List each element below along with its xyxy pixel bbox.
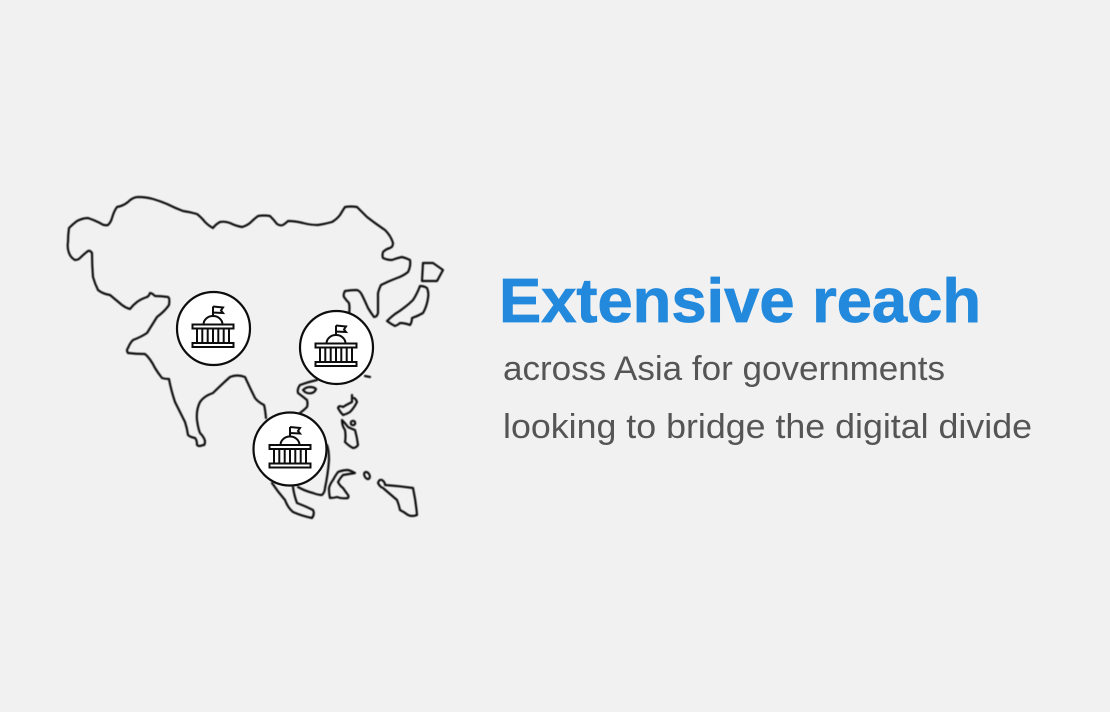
subtext line 2: looking to bridge the digital divide: [503, 408, 1032, 446]
government marker: Southeast Asia: [254, 412, 326, 486]
Malay peninsula and Borneo coast: [272, 483, 314, 518]
government marker: China: [300, 311, 373, 384]
south China coast: [298, 380, 317, 413]
icon: government building: [316, 326, 356, 366]
map of Asia: [68, 197, 443, 518]
government marker: India: [177, 292, 250, 365]
Hainan island: [303, 387, 316, 393]
icon: government building: [270, 427, 310, 468]
small island: [351, 421, 355, 425]
Papua island: [378, 480, 417, 516]
small oval island: [363, 471, 371, 480]
subtext line 1: across Asia for governments: [503, 350, 945, 388]
Mindanao island: [342, 420, 358, 448]
icon: government building: [192, 306, 234, 347]
Sakhalin island: [422, 263, 443, 281]
mainland coastline: [68, 197, 410, 446]
Japan islands: [387, 286, 428, 326]
Taiwan mark: [365, 376, 370, 377]
Luzon island: [338, 395, 357, 415]
Indochina south coast: [298, 445, 329, 495]
Sulawesi island: [329, 470, 355, 498]
heading: Extensive reach: [499, 267, 981, 336]
